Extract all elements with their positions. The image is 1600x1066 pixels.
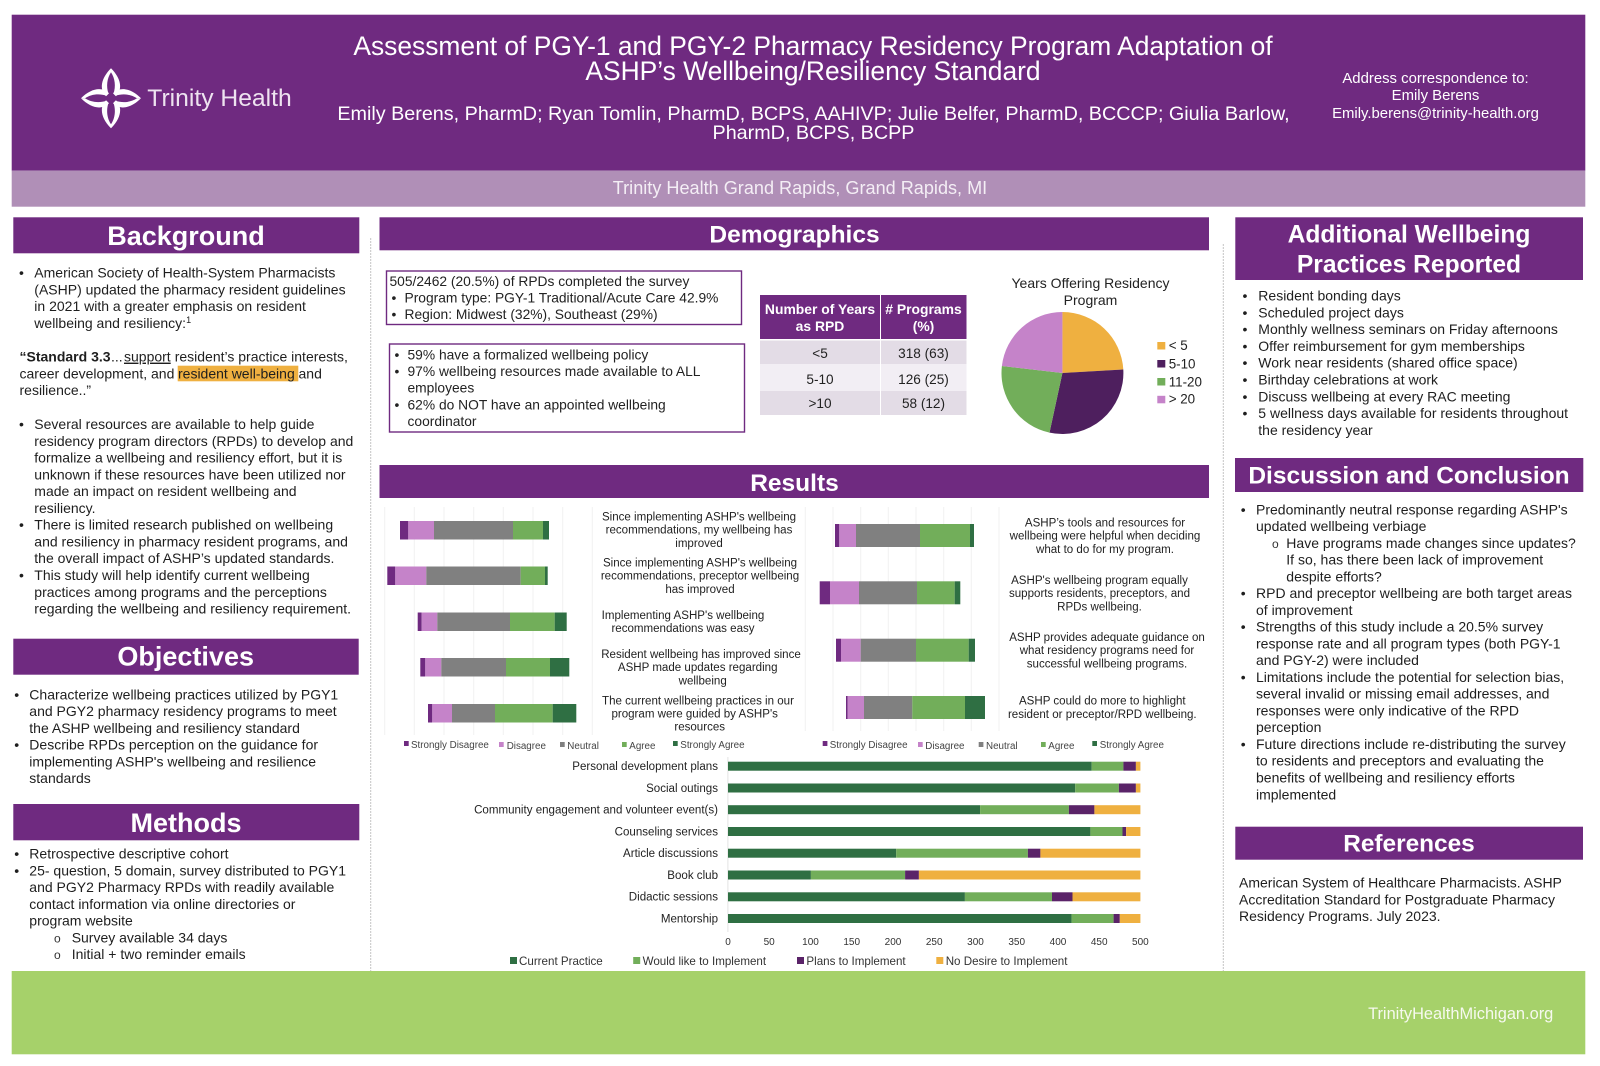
callout: survey response: Region: Midwest (32%), Southeast (29%) [404, 307, 658, 322]
text: background: made an impact on resident wellbeing and [34, 483, 297, 499]
list: discussion: updated wellbeing verbiage [1256, 518, 1427, 534]
category labels: Mentorship [661, 913, 718, 925]
callout: wellbeing policy: 59% have a formalized wellbeing policy [408, 348, 648, 362]
text: background: • [19, 265, 24, 281]
x axis labels: 400 [1050, 937, 1067, 948]
list: discussion: Have programs made changes since updates? [1286, 535, 1576, 551]
statements: likert right: wellbeing were helpful when deciding [1009, 531, 1200, 543]
statements: likert left: Resident wellbeing has improved since [601, 649, 801, 661]
list: additional practices: Discuss wellbeing at every RAC meeting [1258, 388, 1510, 404]
statements: likert right: what residency programs need for [1019, 645, 1194, 657]
text: background: the overall impact of ASHP’s updated standards. [34, 550, 334, 566]
statements: likert left: Since implementing ASHP's wellbeing [603, 557, 797, 569]
legend: likert right: Neutral [986, 741, 1018, 752]
table: years as RPD [760, 295, 966, 415]
poster title: Assessment of PGY-1 and PGY-2 Pharmacy Residency Program Adaptation of [353, 31, 1273, 61]
callout: wellbeing policy: coordinator [408, 414, 477, 429]
callout: wellbeing policy: 62% do NOT have an appointed wellbeing [408, 398, 666, 412]
sub-bullets: methods: o [54, 932, 61, 946]
correspondence: Emily.berens@trinity-health.org [1332, 106, 1539, 122]
list: discussion: benefits of wellbeing and resiliency efforts [1256, 770, 1515, 786]
callout: wellbeing policy [390, 344, 744, 432]
text: background: regarding the wellbeing and resiliency requirement. [34, 600, 351, 616]
legend: likert right: Strongly Disagree [830, 740, 908, 751]
text: background: This study will help identify current wellbeing [34, 567, 310, 583]
pie chart: years offering residency program: Years Offering Residency [1012, 275, 1169, 291]
statements: likert right: ASHP's wellbeing program equally [1011, 575, 1188, 587]
list: discussion: several invalid or missing email addresses, and [1256, 686, 1549, 702]
text: background: There is limited research published on wellbeing [34, 517, 333, 533]
category labels: Didactic sessions [629, 892, 718, 904]
footer url: TrinityHealthMichigan.org [1368, 1005, 1553, 1023]
pie chart: years offering residency program: Program [1064, 292, 1117, 308]
statements: likert left: has improved [665, 584, 735, 596]
x axis labels: 350 [1008, 937, 1025, 948]
list: discussion: • [1241, 585, 1246, 601]
heading: discussion and conclusion: Discussion and Conclusion [1248, 462, 1570, 489]
pie chart: years offering residency program [1001, 275, 1202, 434]
callout: wellbeing policy: • [394, 348, 400, 362]
text: background: (ASHP) updated the pharmacy resident guidelines [34, 282, 346, 298]
text: background: resiliency. [34, 500, 96, 516]
logo: Trinity Health: Trinity Health [147, 85, 292, 112]
list: discussion: despite efforts? [1286, 568, 1382, 584]
category labels: Community engagement and volunteer event(s) [474, 804, 718, 816]
list: additional practices: • [1242, 321, 1248, 337]
panel: objectives [13, 639, 359, 786]
legend: likert left: Disagree [507, 741, 546, 752]
logo: Trinity Health [81, 68, 292, 128]
list: additional practices: Work near residents (shared office space) [1258, 355, 1518, 371]
quote: standard 3.3: resident’s practice interests, [175, 349, 348, 365]
quote: standard 3.3: and [298, 365, 322, 381]
text: background: Several resources are available to help guide [34, 416, 315, 432]
quote: standard 3.3: resident well-being [178, 365, 295, 381]
list: discussion: implemented [1256, 786, 1336, 802]
correspondence: Emily Berens [1392, 88, 1479, 104]
list: additional practices: Scheduled project days [1258, 304, 1404, 320]
statements: likert left: recommendations was easy [611, 623, 755, 635]
heading: additional wellbeing practices: Practices Reported [1297, 251, 1521, 278]
legend: practices: Plans to Implement [806, 955, 906, 968]
quote: standard 3.3: ... [111, 349, 123, 365]
list: additional practices: • [1242, 388, 1248, 404]
heading: background [13, 217, 359, 253]
statements: likert left: The current wellbeing practices in our [602, 695, 794, 707]
callout: survey response: Program type: PGY-1 Traditional/Acute Care 42.9% [404, 290, 718, 306]
institution band: Trinity Health Grand Rapids, Grand Rapids, MI [613, 178, 987, 198]
heading: background: Background [107, 221, 265, 251]
text: background: and resiliency in pharmacy resident programs, and [34, 533, 348, 549]
heading: demographics: Demographics [709, 222, 880, 248]
text: references: Accreditation Standard for Postgraduate Pharmacy [1239, 891, 1555, 907]
callout: wellbeing policy: employees [408, 380, 474, 396]
list: additional practices: Monthly wellness seminars on Friday afternoons [1258, 321, 1558, 337]
x axis labels: 150 [843, 937, 860, 948]
text: background: residency program directors (RPDs) to develop and [34, 433, 353, 449]
legend: practices: Would like to Implement [643, 955, 767, 968]
table: years as RPD: as RPD [796, 318, 844, 334]
sub-bullets: methods: o [54, 948, 61, 962]
list: additional practices: • [1242, 372, 1248, 388]
text: references: Residency Programs. July 2023. [1239, 908, 1441, 924]
correspondence: Address correspondence to: [1342, 71, 1529, 87]
text: background: • [19, 517, 24, 533]
table: years as RPD: Number of Years [765, 301, 875, 317]
list: additional practices: • [1242, 288, 1248, 304]
heading: references: References [1343, 831, 1475, 858]
poster title: ASHP’s Wellbeing/Resiliency Standard [585, 56, 1041, 86]
quote: standard 3.3: support [124, 349, 171, 365]
table: years as RPD: >10 [808, 396, 832, 411]
callout: survey response: • [392, 290, 396, 306]
list: additional practices: the residency year [1258, 422, 1373, 438]
panel: demographics [380, 217, 1209, 434]
callout: wellbeing policy: • [394, 364, 400, 379]
panel: discussion and conclusion [1235, 458, 1583, 802]
text: objectives: and PGY2 pharmacy residency programs to meet [29, 703, 337, 719]
callout: wellbeing policy: 97% wellbeing resources made available to ALL [408, 364, 701, 379]
statements: likert right: supports residents, preceptors, and [1009, 588, 1190, 600]
category labels: Book club [667, 870, 718, 882]
panel: results [380, 465, 1209, 968]
x axis labels: 200 [885, 937, 902, 948]
quote: standard 3.3: resilience..” [20, 382, 91, 398]
text: background: • [19, 416, 24, 432]
list: additional practices: • [1242, 405, 1248, 421]
list: discussion: • [1241, 669, 1246, 685]
legend: likert left: Agree [629, 741, 656, 752]
list: discussion: of improvement [1256, 602, 1353, 618]
panel: background [13, 217, 359, 617]
statements: likert left: wellbeing [678, 675, 727, 687]
text: methods: • [14, 862, 19, 878]
statements: likert right: ASHP could do more to highlight [1019, 696, 1186, 708]
heading: references [1235, 827, 1583, 860]
list: discussion: • [1241, 501, 1246, 517]
table: years as RPD: 318 (63) [898, 346, 949, 361]
text: background: in 2021 with a greater emphasis on resident [34, 298, 306, 314]
statements: likert left: recommendations, preceptor wellbeing [601, 571, 799, 583]
table: years as RPD: # Programs [885, 301, 962, 317]
statements: likert right: RPDs wellbeing. [1057, 601, 1142, 613]
pie legend: 5-10 [1169, 356, 1196, 371]
list: discussion: • [1241, 736, 1246, 752]
heading: results [380, 465, 1209, 498]
list: additional practices: Offer reimbursement for gym memberships [1258, 338, 1525, 354]
text: objectives: • [14, 686, 19, 702]
table: years as RPD: 5-10 [806, 372, 834, 387]
legend: likert right: Agree [1048, 741, 1075, 752]
text: objectives: Describe RPDs perception on the guidance for [29, 737, 318, 753]
category labels: Article discussions [623, 848, 718, 860]
list: additional practices: Resident bonding days [1258, 288, 1401, 304]
pie legend: < 5 [1169, 338, 1188, 353]
statements: likert left: program were guided by ASHP's [611, 708, 778, 720]
statements: likert right: ASHP’s tools and resources for [1025, 517, 1185, 529]
table: years as RPD: (%) [913, 318, 934, 334]
category labels: Personal development plans [572, 761, 718, 773]
heading: demographics [380, 217, 1209, 250]
authors: PharmD, BCPS, BCPP [713, 122, 914, 144]
list: discussion: Limitations include the potential for selection bias, [1256, 669, 1564, 685]
list: discussion: Predominantly neutral response regarding ASHP's [1256, 501, 1568, 517]
list: discussion: to residents and preceptors and evaluating the [1256, 753, 1544, 769]
text: objectives: Characterize wellbeing practices utilized by PGY1 [29, 686, 338, 702]
x axis labels: 500 [1132, 937, 1149, 948]
panel: additional wellbeing practices [1235, 217, 1583, 438]
text: background: 1 [186, 315, 191, 325]
statements: likert left: recommendations, my wellbeing has [606, 525, 793, 537]
x axis labels: 250 [926, 937, 943, 948]
legend: likert left [404, 740, 745, 752]
chart: likert right [805, 507, 1165, 752]
text: background: American Society of Health-System Pharmacists [34, 265, 335, 281]
legend: likert left: Strongly Agree [680, 740, 745, 751]
statements: likert left: Since implementing ASHP's wellbeing [602, 511, 796, 523]
bars [728, 757, 1140, 932]
authors: Emily Berens, PharmD; Ryan Tomlin, PharmD, BCPS, AAHIVP; Julie Belfer, PharmD, BCCCP; Giulia Barlow, [337, 103, 1290, 125]
list: discussion: Future directions include re-distributing the survey [1256, 736, 1566, 752]
heading: additional wellbeing practices: Additional Wellbeing [1288, 222, 1530, 249]
list: discussion: Strengths of this study include a 20.5% survey [1256, 619, 1543, 635]
statements: likert right: resident or preceptor/RPD wellbeing. [1008, 709, 1197, 721]
header banner [12, 15, 1585, 171]
statements: likert left: Implementing ASHP's wellbeing [602, 610, 764, 622]
text: objectives: implementing ASHP's wellbeing and resilience [29, 753, 316, 769]
legend: likert left: Strongly Disagree [411, 740, 489, 751]
list: discussion: RPD and preceptor wellbeing are both target areas [1256, 585, 1572, 601]
list: additional practices: Birthday celebrations at work [1258, 372, 1439, 388]
text: methods: 25- question, 5 domain, survey distributed to PGY1 [29, 862, 346, 878]
legend: likert right: Strongly Agree [1100, 740, 1165, 751]
heading: objectives [13, 639, 359, 675]
callout: wellbeing policy: • [394, 398, 400, 412]
category labels: Counseling services [615, 826, 718, 838]
sub-bullet: discussion: o [1272, 537, 1279, 551]
text: methods: contact information via online directories or [29, 896, 296, 912]
list: discussion: • [1241, 619, 1246, 635]
text: methods: Initial + two reminder emails [72, 946, 246, 962]
statements: likert left: ASHP made updates regarding [618, 662, 778, 674]
text: methods: • [14, 846, 19, 862]
category labels: Social outings [646, 783, 718, 795]
text: objectives: • [14, 737, 19, 753]
text: references: American System of Healthcare Pharmacists. ASHP [1239, 874, 1562, 890]
text: background: • [19, 567, 24, 583]
legend: likert right: Disagree [925, 741, 965, 752]
list: additional practices: • [1242, 304, 1248, 320]
legend: likert left: Neutral [567, 741, 599, 752]
list: discussion: and PGY-2) were included [1256, 652, 1419, 668]
text: objectives: standards [29, 770, 91, 786]
statements: likert right: ASHP provides adequate guidance on [1009, 632, 1205, 644]
text: methods: program website [29, 913, 133, 929]
callout: survey response: 505/2462 (20.5%) of RPDs completed the survey [390, 274, 689, 289]
chart: likert left [385, 507, 745, 752]
statements: likert left: resources [674, 722, 725, 734]
legend: practices: Current Practice [519, 955, 603, 968]
institution band [12, 171, 1585, 207]
list: additional practices: 5 wellness days available for residents throughout [1258, 405, 1568, 421]
table: years as RPD: <5 [812, 346, 828, 361]
quote: standard 3.3: “Standard 3.3 [20, 349, 111, 365]
legend: likert right [823, 740, 1165, 752]
pie legend: > 20 [1169, 392, 1195, 407]
callout: survey response: • [392, 307, 396, 322]
text: methods: Survey available 34 days [72, 930, 227, 946]
list: discussion: response rate and all program types (both PGY-1 [1256, 635, 1561, 651]
x axis labels: 50 [764, 937, 775, 948]
x axis labels: 0 [725, 937, 731, 948]
heading: objectives: Objectives [117, 642, 254, 672]
list: discussion: perception [1256, 719, 1321, 735]
legend: practices [510, 955, 1068, 968]
text: background: practices among programs and the perceptions [34, 584, 327, 600]
text: methods: Retrospective descriptive cohort [29, 846, 229, 862]
heading: methods [13, 804, 359, 840]
table: years as RPD: 126 (25) [898, 372, 949, 387]
list: additional practices: • [1242, 355, 1248, 371]
heading: results: Results [750, 470, 839, 497]
text: background: unknown if these resources have been utilized nor [34, 466, 346, 482]
text: background: wellbeing and resiliency: [33, 315, 191, 331]
list: additional practices: • [1242, 338, 1248, 354]
x axis labels: 450 [1091, 937, 1108, 948]
quote: standard 3.3 [20, 349, 348, 398]
statements: likert left: improved [675, 538, 723, 550]
x axis labels: 300 [967, 937, 984, 948]
footer band [12, 971, 1585, 1054]
x axis labels: 100 [802, 937, 819, 948]
pie legend [1157, 338, 1202, 407]
statements: likert right: what to do for my program. [1035, 544, 1174, 556]
pie legend: 11-20 [1169, 374, 1202, 389]
table: years as RPD: 58 (12) [902, 396, 945, 411]
text: methods: and PGY2 Pharmacy RPDs with readily available [29, 879, 335, 895]
panel: references [1235, 827, 1583, 924]
quote: standard 3.3: career development, and [20, 365, 178, 381]
panel: methods [13, 804, 359, 962]
heading: additional wellbeing practices [1235, 217, 1583, 280]
chart: wellbeing practices stacked bars [474, 757, 1149, 968]
list: discussion: If so, has there been lack of improvement [1286, 552, 1543, 568]
text: objectives: the ASHP wellbeing and resiliency standard [29, 720, 300, 736]
callout: survey response [386, 271, 742, 324]
statements: likert right: successful wellbeing programs. [1027, 658, 1187, 670]
legend: practices: No Desire to Implement [946, 955, 1068, 968]
heading: methods: Methods [130, 808, 242, 838]
list: discussion: responses were only indicative of the RPD [1256, 702, 1519, 718]
text: background: formalize a wellbeing and resiliency effort, but it is [34, 450, 342, 466]
